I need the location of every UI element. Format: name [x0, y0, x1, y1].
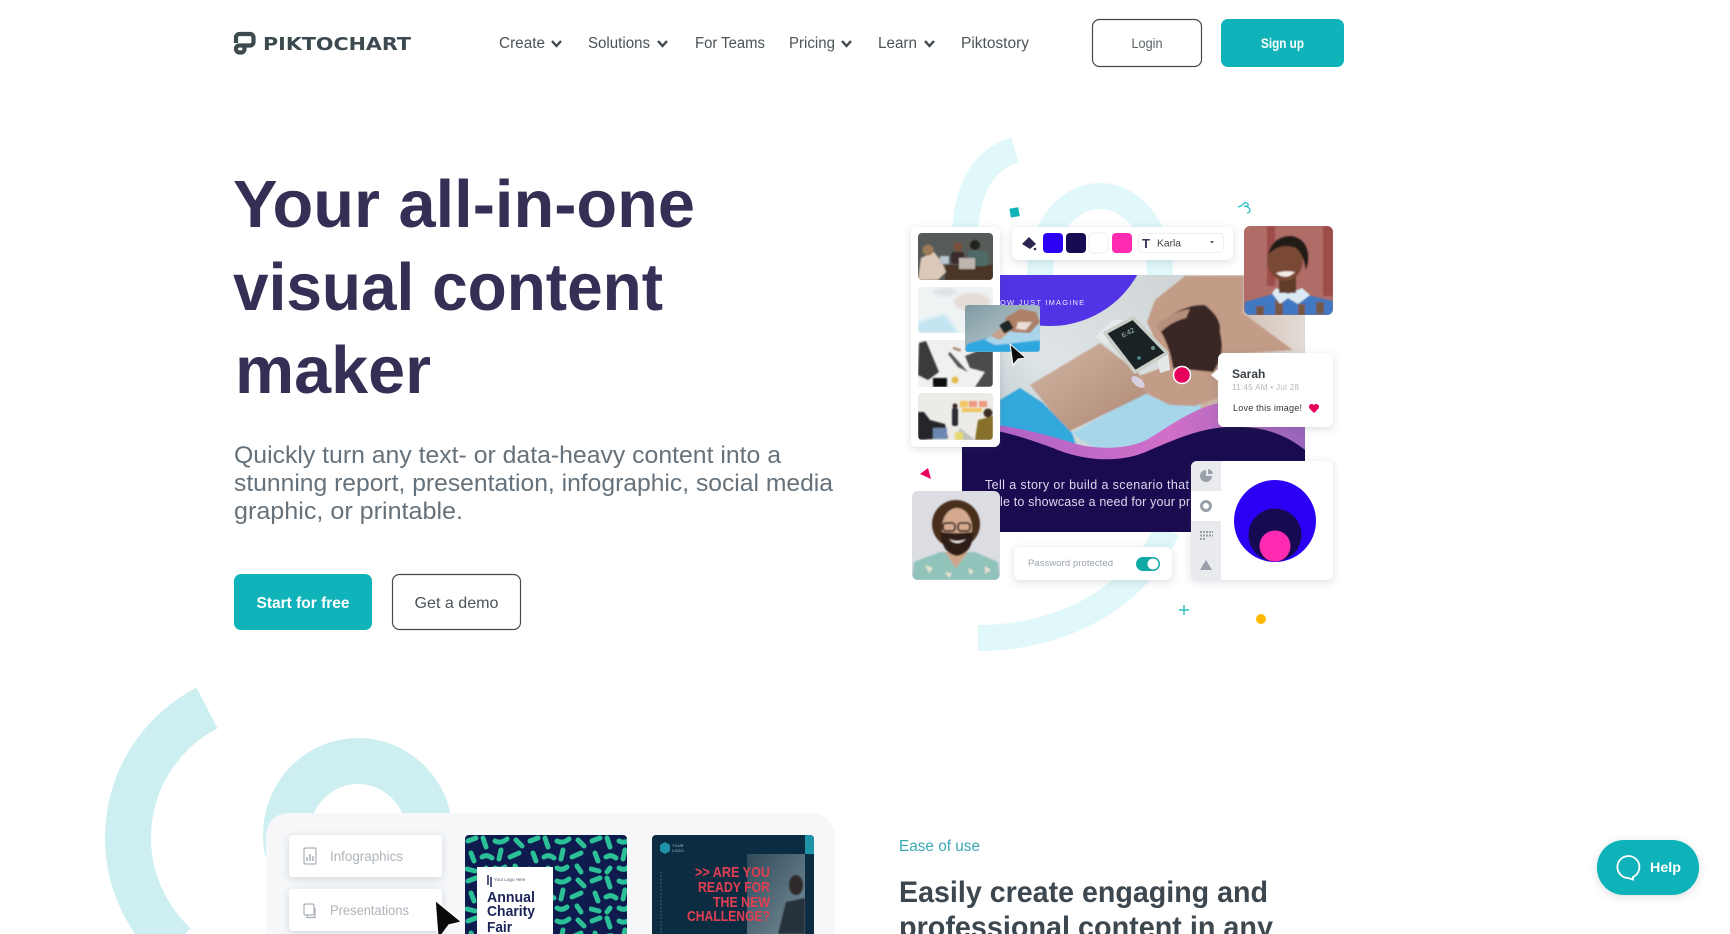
- icon: slide page: [304, 904, 315, 918]
- slide copy: le to showcase a need for your pr: [1000, 495, 1190, 509]
- purple wave band: [1000, 403, 1305, 460]
- decorative arcs: [965, 150, 1167, 638]
- headline: CHALLENGE?: [687, 908, 770, 925]
- password protected card: [1014, 547, 1172, 580]
- chart card: [1191, 461, 1333, 580]
- tab: Presentations: Presentations: [330, 902, 409, 918]
- slide label: OW JUST IMAGINE: [1000, 298, 1085, 307]
- ease of use section graphic: [128, 708, 835, 934]
- get a demo button: Get a demo: [414, 595, 499, 612]
- hero heading: [233, 167, 695, 408]
- confetti: red triangle: [920, 468, 931, 479]
- menu item: Create: Create: [499, 35, 545, 52]
- headline: [688, 867, 770, 921]
- thumbnail: team at table: [918, 233, 993, 280]
- font dropdown: T: [1142, 236, 1150, 251]
- icon: heart: [1309, 404, 1319, 413]
- thumbnail panel: [911, 227, 1000, 447]
- slide copy: Tell a story or build a scenario that: [985, 478, 1190, 492]
- comment card: Sarah: Love this image!: [1233, 403, 1302, 413]
- tab: Infographics: Infographics: [330, 848, 403, 864]
- headline: READY FOR: [698, 879, 770, 896]
- template gallery panel: [266, 813, 835, 934]
- photo: [747, 854, 805, 934]
- hero description: graphic, or printable.: [234, 498, 463, 525]
- hero heading: visual content: [233, 250, 663, 325]
- font dropdown: [1138, 234, 1224, 252]
- decorative arcs: [128, 708, 430, 934]
- logo placeholder: [488, 875, 526, 887]
- menu item: Solutions: Solutions: [588, 35, 650, 52]
- icon: pie: [1200, 470, 1212, 482]
- headline: THE NEW: [713, 894, 771, 911]
- thumbnail: office meeting: [918, 393, 993, 440]
- help button: Help: [1650, 859, 1681, 875]
- icon: chart page: [304, 848, 316, 864]
- icon: speech bubble: [1617, 856, 1639, 880]
- hero illustration: [911, 126, 1333, 638]
- hero description: Quickly turn any text- or data-heavy content into a: [234, 442, 782, 469]
- menu item: Pricing: Pricing: [789, 35, 835, 52]
- logo placeholder: [660, 842, 684, 854]
- navigation bar: [236, 19, 1344, 67]
- template: annual charity fair: Charity: [487, 903, 536, 920]
- menu item: Learn: Learn: [878, 35, 917, 52]
- main slide image: [962, 275, 1305, 532]
- chart sidebar: [1191, 461, 1221, 580]
- watch: [1095, 318, 1170, 373]
- logo placeholder: LOGO: [672, 848, 684, 853]
- logo placeholder: YOUR: [672, 843, 684, 848]
- comment card: Sarah: Sarah: [1232, 367, 1265, 381]
- hero description: [234, 442, 834, 525]
- get a demo button: [392, 574, 520, 630]
- thumbnail: desk: [918, 340, 993, 387]
- section eyebrow: ease of use: Ease of use: [899, 838, 980, 855]
- help button: [1597, 840, 1699, 895]
- template: are you ready: [652, 835, 814, 934]
- confetti: plus: [1179, 605, 1189, 615]
- slide copy: [985, 478, 1190, 509]
- purple circle: [1000, 275, 1138, 326]
- template: annual charity fair: Annual: [487, 889, 535, 906]
- password protected card: Password protected: [1028, 558, 1113, 569]
- photo: wrist, watch and hand: [1000, 276, 1305, 452]
- confetti: squiggle: [1238, 202, 1250, 213]
- logo icon: [236, 34, 254, 53]
- comment marker dot: [1174, 366, 1190, 384]
- comment card: Sarah: [1211, 353, 1333, 427]
- hero heading: Your all-in-one: [233, 167, 695, 242]
- sign up button: Sign up: [1261, 36, 1304, 51]
- navy wave: [962, 427, 1305, 532]
- watch: 6:42: [1121, 327, 1136, 340]
- confetti: yellow dot: [1256, 614, 1266, 624]
- font dropdown: Karla: [1157, 238, 1181, 250]
- headline: >> ARE YOU: [695, 864, 770, 881]
- tab: Presentations: [289, 889, 442, 931]
- toggle switch: [1136, 557, 1160, 571]
- floating dragged thumbnail: [965, 305, 1040, 352]
- template: annual charity fair: [465, 835, 627, 934]
- section heading: [899, 876, 1273, 934]
- large cursor: [435, 900, 462, 934]
- hero description: stunning report, presentation, infographic, social media: [234, 470, 834, 497]
- portrait: bearded man: [912, 491, 1000, 580]
- icon: paint bucket: [1022, 237, 1036, 250]
- swatches: [1043, 233, 1132, 253]
- portrait: smiling woman: [1244, 226, 1333, 315]
- start for free button: Start for free: [256, 595, 350, 612]
- confetti: teal square: [1009, 207, 1020, 218]
- colour toolbar: [1012, 227, 1233, 260]
- tab: Infographics: [289, 835, 442, 877]
- start for free button: [234, 574, 372, 630]
- thumbnail: faded hand: [918, 287, 993, 333]
- icon: dot grid: [1200, 532, 1213, 539]
- section heading: Easily create engaging and: [899, 876, 1268, 909]
- logo wordmark: PIKTOCHART: [263, 34, 412, 55]
- menu item: For Teams: For Teams: [695, 35, 765, 52]
- hero heading: maker: [235, 333, 431, 408]
- logo placeholder: Your Logo Here: [494, 877, 526, 882]
- icon: donut: [1202, 502, 1210, 510]
- icon: pyramid: [1200, 560, 1212, 570]
- login button: Login: [1132, 36, 1162, 51]
- drag cursor: [1010, 344, 1026, 365]
- thumbnail nail: [1131, 376, 1145, 388]
- comment card: Sarah: 11:45 AM • Jul 28: [1232, 383, 1300, 392]
- login button: [1092, 20, 1202, 66]
- nested circle chart: [1234, 480, 1316, 562]
- sign up button: [1221, 19, 1344, 67]
- menu item: Piktostory: Piktostory: [961, 35, 1029, 52]
